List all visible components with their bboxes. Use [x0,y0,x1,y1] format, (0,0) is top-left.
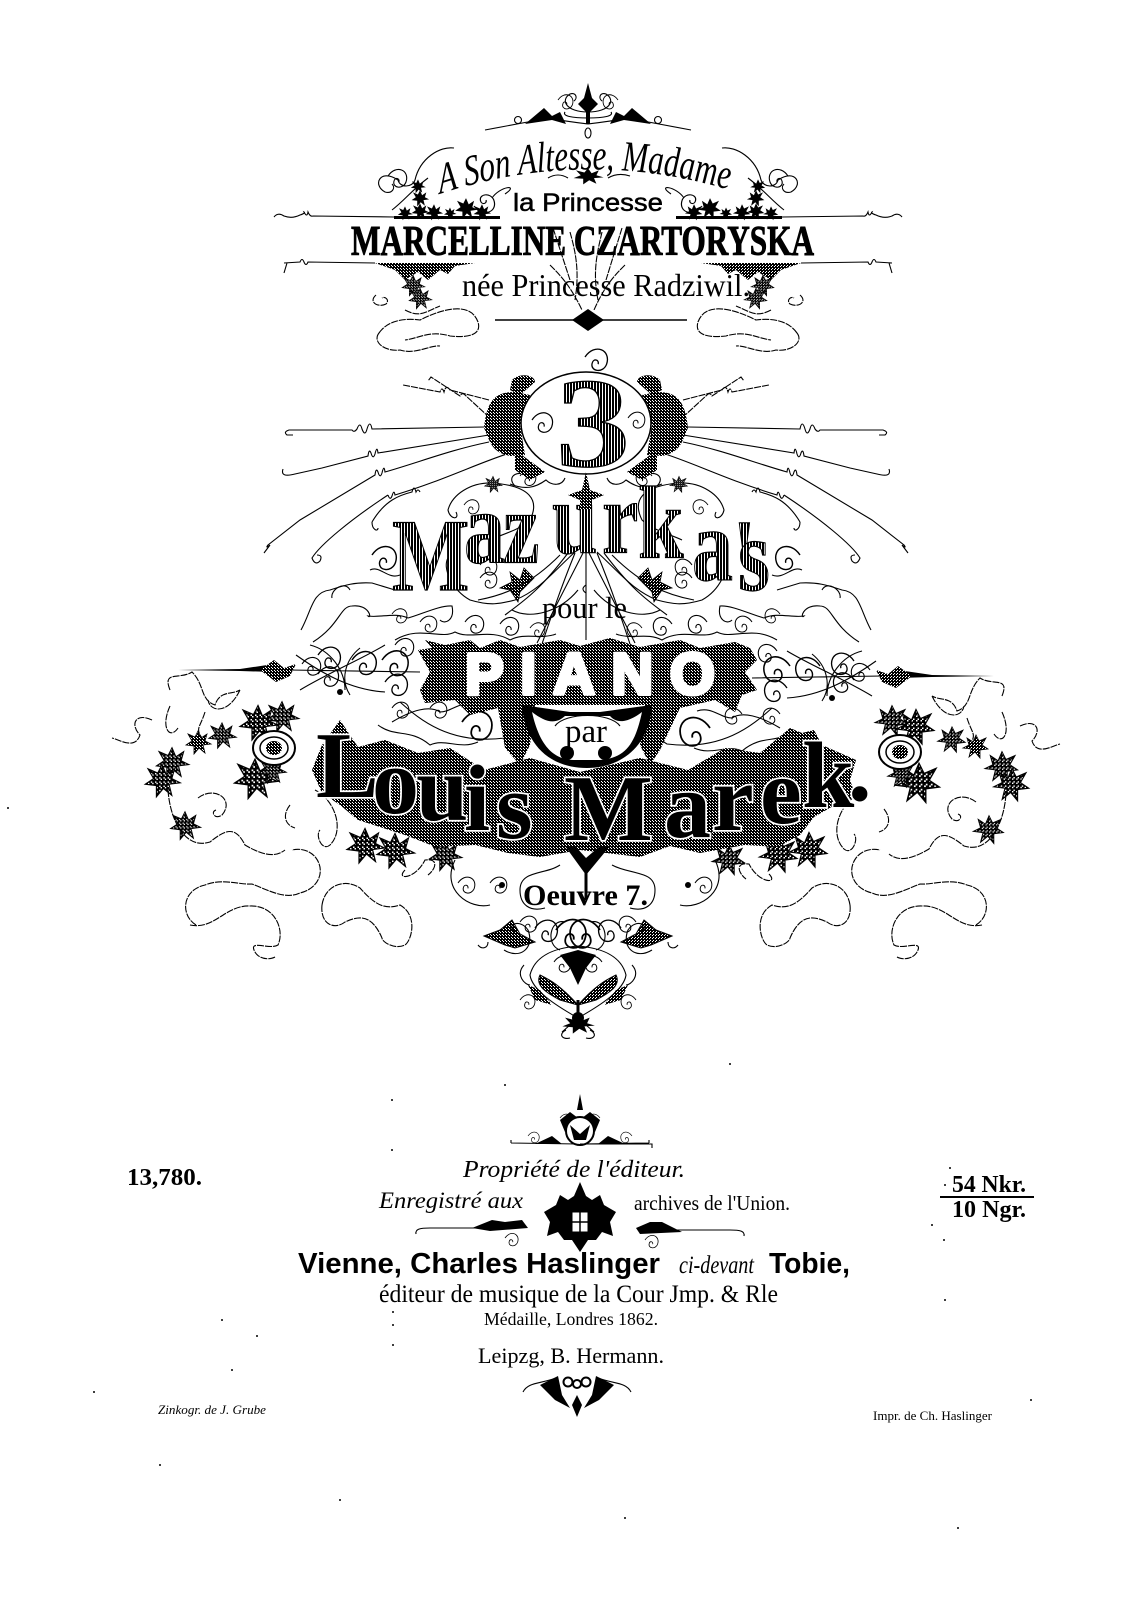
pendant ornament [478,916,678,1038]
flourish left of eagle [416,1220,528,1246]
text: Oeuvre 7: Oeuvre 7. [523,879,648,912]
dedication crest ornament [485,83,691,138]
ornament behind Oeuvre [451,846,719,909]
medal line: Médaille, Londres 1862. [484,1309,658,1329]
publisher crest ornament [511,1094,652,1148]
star ornament above Mazurka's [568,472,604,510]
heading: PIANO: PIANO [465,642,715,707]
dedication line: A Son Altesse, Madame: A Son Altesse, Madame [438,142,731,194]
publisher text: Enregistré aux: Enregistré aux [378,1188,524,1213]
publisher title line: éditeur de musique de la Cour Jmp. & Rle [379,1281,778,1308]
price box [940,1172,1034,1223]
Leipzig agent: Leipzg, B. Hermann. [478,1343,664,1368]
composer name: Louis Marek.: Louis Marek. [316,714,872,861]
dark stippled band behind composer name [312,720,856,857]
scan speckles [7,807,1032,1529]
spray of rays and scrolls around title [264,349,908,650]
roses, leaves and clouds [145,702,1029,959]
numeral 3 medallion [484,352,688,494]
printer credit: Impr. de Ch. Haslinger [873,1409,993,1423]
publisher name line: Vienne, Charles Haslinger [298,1248,660,1280]
dark stippled band behind PIANO [418,638,757,765]
price box: 10 Ngr. [952,1197,1026,1223]
numeral 3 text: 3 [556,352,630,494]
publisher name line [298,1248,850,1280]
dedicatee name: MARCELLINE CZARTORYSKA [351,219,814,265]
publisher name line: ci-devant [679,1252,755,1279]
publisher name line: Tobie, [769,1248,850,1280]
par lobe ornament [522,705,652,768]
publisher text: Propriété de l'éditeur: Propriété de l'éditeur. [462,1157,685,1183]
central diamond rule under dedication [495,228,687,331]
engraver credit: Zinkogr. de J. Grube [158,1402,266,1417]
dedication flourishes with leaves [274,148,902,351]
plate number: 13,780. [127,1165,202,1191]
publisher text: archives de l'Union: archives de l'Union. [634,1191,790,1215]
closing ornament [523,1376,631,1417]
text: pour le: pour le [542,590,627,625]
price box: 54 Nkr. [952,1172,1026,1198]
text: par: par [565,714,607,750]
dedication line: la Princesse: la Princesse [513,189,663,217]
filigree bands either side of PIANO [112,638,1060,751]
title: Mazurka's: Mazurka's [392,462,770,613]
icon: double-headed eagle [544,1182,616,1252]
dedication line: née Princesse Radziwil: née Princesse Radziwil. [462,267,750,303]
flourish right of eagle [636,1222,744,1248]
